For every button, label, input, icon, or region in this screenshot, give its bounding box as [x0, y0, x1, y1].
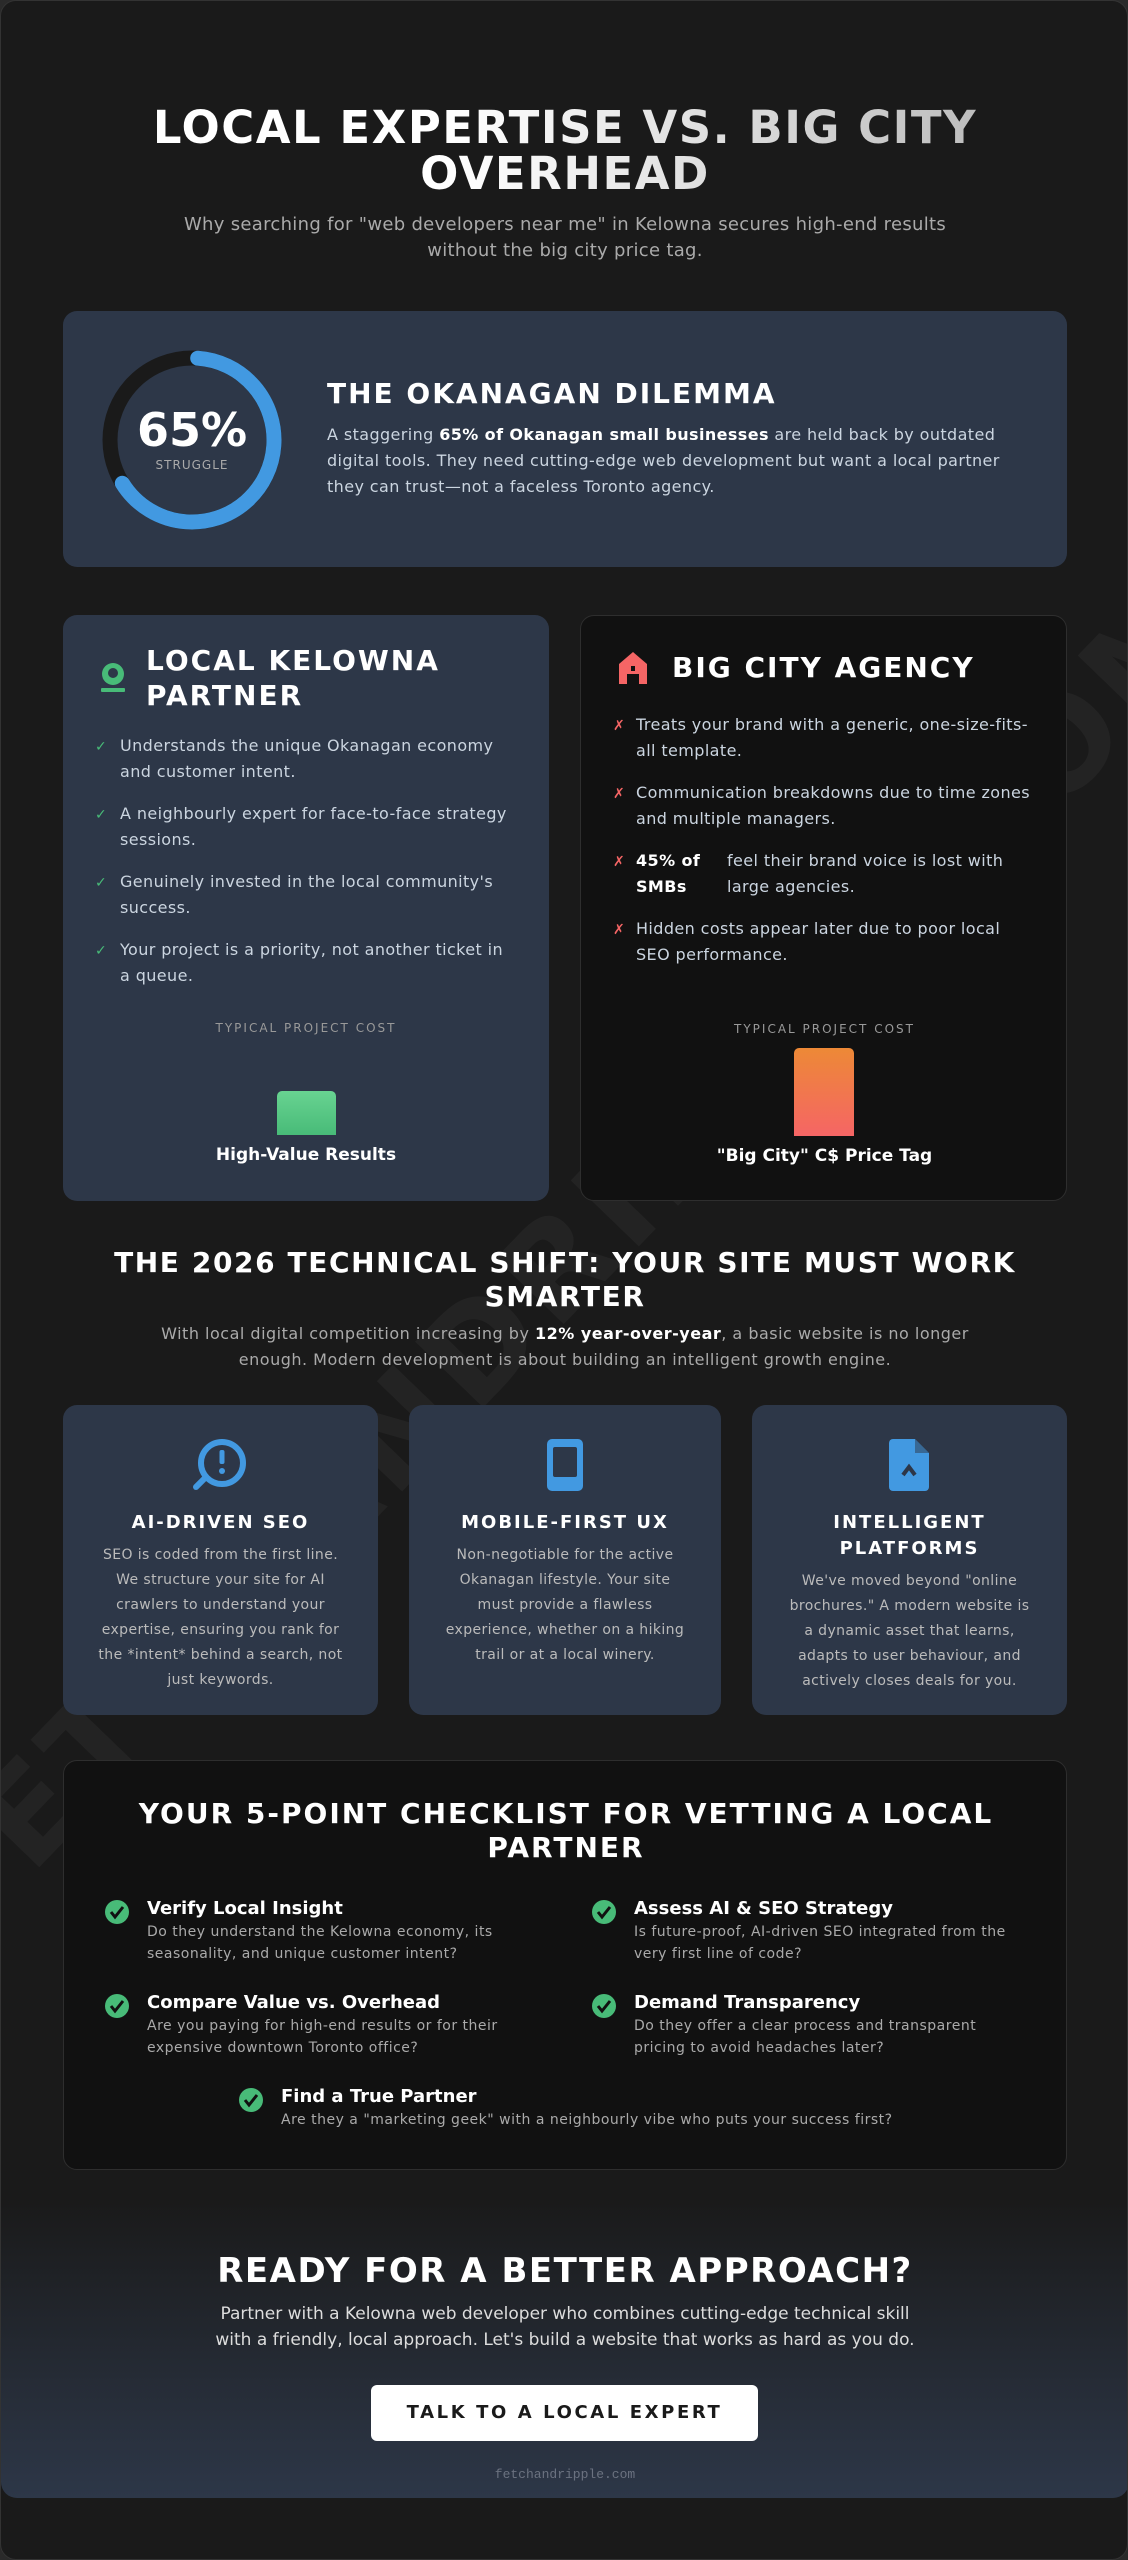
icon: building [619, 652, 647, 684]
checklist item 5: Find a True Partner [281, 2086, 477, 2107]
heading: technical shift: THE 2026 TECHNICAL SHIFT: YOUR SITE MUST WORK SMARTER [114, 1246, 1016, 1313]
list: benefits: ✓ [95, 739, 107, 755]
bar: local cost [277, 1091, 336, 1135]
checklist item 2: Is future-proof, AI-driven SEO integrated from the very first line of code? [634, 1924, 1006, 1962]
checklist item 1 [105, 1898, 493, 1962]
heading: READY FOR A BETTER APPROACH? [217, 2251, 913, 2291]
button: TALK TO A LOCAL EXPERT [407, 2402, 722, 2423]
list: drawbacks: Communication breakdowns due to time zones and multiple managers. [636, 783, 1030, 828]
list: benefits: ✓ [95, 807, 107, 823]
panel: AI-driven SEO [63, 1405, 378, 1715]
checklist item 1: Verify Local Insight [147, 1898, 343, 1919]
list: drawbacks: Treats your brand with a generic, one-size-fits-all template. [636, 715, 1028, 760]
footer url: fetchandripple.com [495, 2467, 635, 2482]
caption: TYPICAL PROJECT COST [734, 1022, 915, 1036]
heading: THE OKANAGAN DILEMMA [327, 377, 777, 410]
list: drawbacks: 45% of SMBs [636, 851, 700, 896]
list: benefits: Understands the unique Okanagan economy and customer intent. [120, 736, 493, 781]
title: MOBILE-FIRST UX [461, 1512, 669, 1533]
heading: BIG CITY AGENCY [672, 651, 975, 684]
icon: location pin [101, 663, 125, 692]
checklist item 3: Are you paying for high-end results or for their expensive downtown Toronto office? [147, 2018, 498, 2056]
list: benefits [95, 736, 507, 985]
title: LOCAL EXPERTISE VS. BIG CITY OVERHEAD [153, 101, 977, 200]
checklist item 1: Do they understand the Kelowna economy, its seasonality, and unique customer intent? [147, 1924, 493, 1962]
checklist item 2 [592, 1898, 1006, 1962]
button [371, 2385, 758, 2441]
checklist item 2: Assess AI & SEO Strategy [634, 1898, 893, 1919]
bar: big city cost [794, 1048, 854, 1136]
heading: YOUR 5-POINT CHECKLIST FOR VETTING A LOCAL PARTNER [139, 1797, 993, 1864]
text: We've moved beyond "online brochures." A modern website is a dynamic asset that learns, adapts to user behaviour, and actively closes deals for you. [790, 1573, 1029, 1689]
panel: mobile-first UX [409, 1405, 721, 1715]
checklist item 3: Compare Value vs. Overhead [147, 1992, 440, 2013]
checklist item 5: Are they a "marketing geek" with a neighbourly vibe who puts your success first? [281, 2112, 893, 2128]
panel: intelligent platforms [752, 1405, 1067, 1715]
donut chart: 65%: STRUGGLE [156, 458, 228, 472]
list: drawbacks [613, 715, 1030, 964]
list: drawbacks: ✗ [613, 854, 625, 870]
text: Non-negotiable for the active Okanagan lifestyle. Your site must provide a flawless experience, whether on a hiking trail or at a local winery. [446, 1547, 684, 1663]
list: benefits: Your project is a priority, not another ticket in a queue. [120, 940, 503, 985]
checklist item 4 [592, 1992, 976, 2056]
label: "Big City" C$ Price Tag [717, 1146, 932, 1166]
donut chart: 65%: 65% [137, 403, 247, 457]
title: AI-DRIVEN SEO [132, 1512, 309, 1533]
heading [146, 644, 440, 712]
list: drawbacks: Hidden costs appear later due to poor local SEO performance. [636, 919, 1000, 964]
list: drawbacks: feel their brand voice is lost with large agencies. [727, 851, 1003, 896]
list: drawbacks: ✗ [613, 922, 625, 938]
list: drawbacks: ✗ [613, 786, 625, 802]
panel: local Kelowna partner [63, 615, 549, 1201]
heading: PARTNER [146, 679, 303, 712]
list: benefits: ✓ [95, 943, 107, 959]
checklist item 4: Do they offer a clear process and transparent pricing to avoid headaches later? [634, 2018, 976, 2056]
title [1, 105, 1128, 197]
checklist item 5 [239, 2086, 893, 2128]
checklist item 4: Demand Transparency [634, 1992, 860, 2013]
list: drawbacks: ✗ [613, 718, 625, 734]
title: INTELLIGENT PLATFORMS [833, 1512, 986, 1559]
text: Partner with a Kelowna web developer who combines cutting-edge technical skill with a friendly, local approach. Let's build a website that works as hard as you do. [215, 2304, 915, 2350]
donut chart: 65% [102, 350, 282, 530]
text block: A staggering 65% of Okanagan small businesses are held back by outdated digital tools. They need cutting-edge web development but want a local partner they can trust—not a faceless Toronto agency. [327, 425, 1000, 496]
checklist item 3 [105, 1992, 498, 2056]
subtitle: Why searching for "web developers near me" in Kelowna secures high-end results without the big city price tag. [184, 214, 946, 261]
text: technical shift: With local digital competition increasing by 12% year-over-year, a basic website is no longer enough. Modern development is about building an intelligent growth engine. [161, 1324, 969, 1369]
panel: big city agency [580, 615, 1067, 1201]
text: SEO is coded from the first line. We structure your site for AI crawlers to understand your expertise, ensuring you rank for the *intent* behind a search, not just keywords. [98, 1547, 343, 1688]
list: benefits: ✓ [95, 875, 107, 891]
icon: search alert [193, 1439, 246, 1490]
label: High-Value Results [216, 1145, 396, 1165]
panel: 5-point checklist [63, 1760, 1067, 2170]
list: benefits: Genuinely invested in the local community's success. [120, 872, 493, 917]
list: benefits: A neighbourly expert for face-to-face strategy sessions. [120, 804, 507, 849]
icon: phone [547, 1439, 583, 1491]
panel: call to action [1, 2201, 1128, 2498]
heading: LOCAL KELOWNA [146, 644, 440, 677]
caption: TYPICAL PROJECT COST [216, 1021, 396, 1035]
icon: document [889, 1439, 929, 1491]
panel: Okanagan dilemma [63, 311, 1067, 567]
